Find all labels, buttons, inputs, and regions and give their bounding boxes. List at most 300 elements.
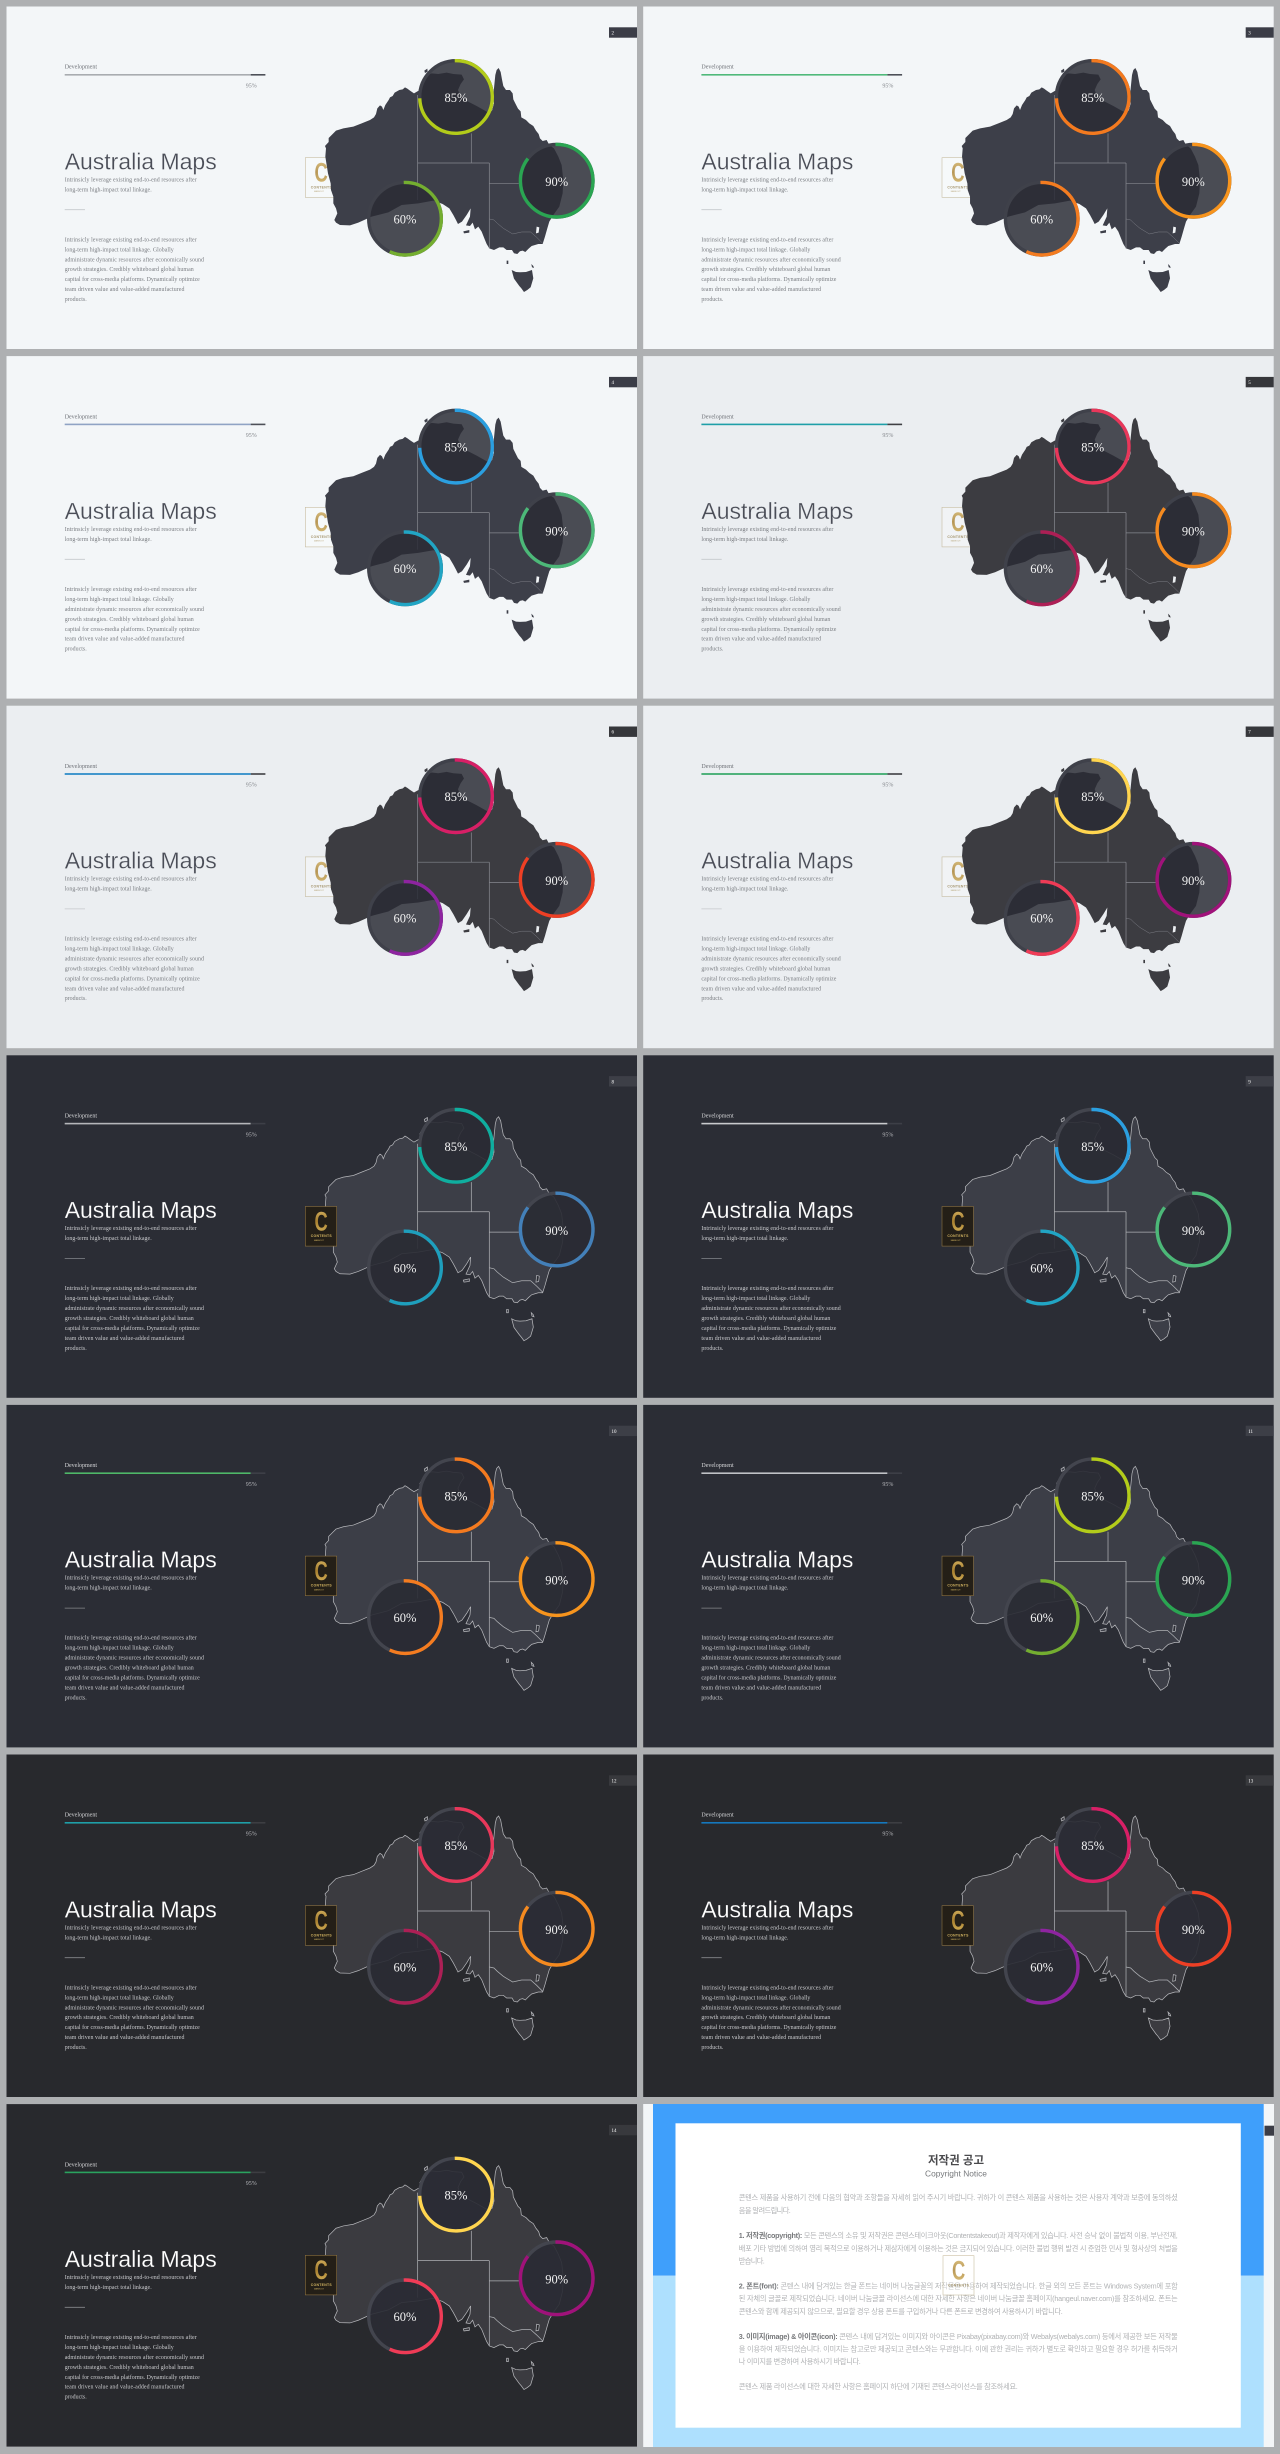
logo: MAKEOUT <box>951 1588 961 1591</box>
heading: development: Development <box>65 2162 97 2168</box>
title: Australia Maps <box>701 1197 853 1223</box>
circle: 90% <box>1156 143 1231 218</box>
map of Australia <box>962 1117 1200 1341</box>
circle: 90%: 90% <box>1182 1923 1205 1937</box>
subtitle: Intrinsicly leverage existing end-to-end resources after <box>701 1924 833 1931</box>
progress value: 95% <box>882 1832 893 1838</box>
body paragraph: team driven value and value-added manufactured <box>701 1335 821 1342</box>
panel: copyright notice <box>643 2104 1274 2447</box>
circle: 85% <box>1055 1458 1130 1533</box>
circle: 60%: 60% <box>394 562 416 576</box>
body paragraph: Intrinsicly leverage existing end-to-end resources after <box>701 236 833 243</box>
progress value: 95% <box>882 1482 893 1488</box>
circle: 85% <box>1055 409 1130 484</box>
logo: C <box>314 856 328 887</box>
progress value: 95% <box>246 2181 257 2187</box>
section: image and icon <box>739 2332 1178 2366</box>
heading: development: Development <box>65 65 97 71</box>
logo: C <box>951 507 965 537</box>
body paragraph: growth strategies. Credibly whiteboard global human <box>65 267 194 273</box>
circle: 85%: 85% <box>445 2189 467 2203</box>
page number tab: 10 <box>612 1430 617 1435</box>
page number tab <box>609 377 637 387</box>
body paragraph: growth strategies. Credibly whiteboard global human <box>701 1666 830 1672</box>
circle: 85% <box>418 1108 494 1183</box>
circle: 85% <box>1055 759 1130 834</box>
circle: 85% <box>418 59 494 135</box>
circle: 90%: 90% <box>545 1224 568 1238</box>
heading: development: Development <box>701 1114 734 1120</box>
circle: 90%: 90% <box>1182 1573 1205 1587</box>
heading: development: Development <box>701 65 734 71</box>
circle: 85%: 85% <box>1081 1140 1104 1154</box>
circle: 60%: 60% <box>394 1960 416 1974</box>
logo: CONTENTS <box>311 1584 332 1588</box>
page number tab <box>609 1426 637 1436</box>
logo: C <box>951 1555 965 1586</box>
body paragraph: growth strategies. Credibly whiteboard global human <box>65 617 194 623</box>
circle: 60% <box>367 1580 443 1655</box>
section: copyright: 1. 저작권(copyright): 모든 콘텐스의 소유 및 저작권은 콘텐스테이크아웃(Contentstakeout)과 제작자에게 있습니다. 사전 승낙 없이 불법적 이용, 부난전재, <box>739 2231 1178 2240</box>
circle: 85%: 85% <box>1081 1489 1104 1503</box>
circle: 85% <box>418 409 494 484</box>
logo: CONTENTS <box>947 1933 969 1937</box>
section: copyright: 받습니다. <box>739 2256 765 2266</box>
body paragraph: team driven value and value-added manufactured <box>701 985 821 992</box>
logo: C <box>951 856 965 887</box>
body paragraph: team driven value and value-added manufactured <box>65 1685 184 1692</box>
title: Australia Maps <box>65 1547 217 1573</box>
body paragraph: long-term high-impact total linkage. Globally <box>701 1995 810 2001</box>
body paragraph: products. <box>701 1346 724 1352</box>
circle: 90% <box>519 1891 594 1966</box>
circle: 90%: 90% <box>545 525 568 539</box>
page number tab <box>1246 1426 1274 1436</box>
logo: MAKEOUT <box>314 1239 325 1242</box>
body paragraph: growth strategies. Credibly whiteboard global human <box>65 1316 194 1322</box>
section: font: 2. 폰트(font): 콘텐스 내에 담겨있는 한글 폰트는 네이버 나눔글꼴의 저작물을 이용하여 제작되었습니다. 한글 외의 모든 폰트는 Windows System에 포함 <box>739 2282 1178 2290</box>
subtitle: Intrinsicly leverage existing end-to-end resources after <box>65 176 197 183</box>
body paragraph: growth strategies. Credibly whiteboard global human <box>701 617 830 623</box>
subtitle: long-term high-impact total linkage. <box>701 187 789 193</box>
body paragraph: long-term high-impact total linkage. Globally <box>65 947 174 953</box>
body paragraph: growth strategies. Credibly whiteboard global human <box>65 1666 194 1672</box>
circle: 85% <box>418 759 494 834</box>
body paragraph: products. <box>65 996 87 1002</box>
body paragraph: team driven value and value-added manufactured <box>65 985 184 992</box>
logo: MAKEOUT <box>314 889 325 892</box>
progress bar <box>65 1123 265 1124</box>
subtitle <box>701 1225 833 1242</box>
circle: 85% <box>418 2157 494 2232</box>
intro text <box>739 2193 1178 2215</box>
subtitle: long-term high-impact total linkage. <box>701 537 789 543</box>
body paragraph: team driven value and value-added manufactured <box>65 286 184 293</box>
page number tab <box>609 2125 637 2135</box>
body paragraph <box>701 236 841 303</box>
subtitle: long-term high-impact total linkage. <box>65 1586 152 1592</box>
page number tab: 5 <box>1248 381 1251 386</box>
circle: 85%: 85% <box>445 1489 467 1503</box>
subtitle: long-term high-impact total linkage. <box>65 537 152 543</box>
circle: 60% <box>367 1230 443 1305</box>
body paragraph: Intrinsicly leverage existing end-to-end resources after <box>65 586 197 593</box>
subtitle: long-term high-impact total linkage. <box>65 1935 152 1941</box>
logo: CONTENTS <box>311 1933 332 1937</box>
body paragraph: Intrinsicly leverage existing end-to-end resources after <box>65 936 197 943</box>
circle: 60%: 60% <box>1030 212 1053 226</box>
body paragraph: capital for cross-media platforms. Dynamically optimize <box>701 1675 837 1682</box>
title: Australia Maps <box>65 1197 217 1223</box>
intro text: 콘텐스 제품을 사용하기 전에 다음의 협약과 조항들을 자세히 읽어 주시기 바랍니다. 귀하가 이 콘텐스 제품을 사용하는 것은 사용자 계약과 보증에 동의하셨 <box>739 2193 1178 2202</box>
body paragraph: products. <box>701 996 724 1002</box>
body paragraph: growth strategies. Credibly whiteboard global human <box>701 267 830 273</box>
subtitle: Intrinsicly leverage existing end-to-end resources after <box>701 176 833 183</box>
circle: 90%: 90% <box>545 874 568 888</box>
title: Australia Maps <box>65 2246 217 2272</box>
progress bar <box>701 1472 902 1474</box>
subtitle <box>701 526 833 543</box>
body paragraph <box>65 586 204 653</box>
logo: CONTENTS <box>948 2284 970 2288</box>
panel: slide 11 <box>643 1405 1274 1747</box>
body paragraph <box>65 936 204 1002</box>
circle: 90%: 90% <box>1182 1224 1205 1238</box>
body paragraph: administrate dynamic resources after economically sound <box>701 1305 841 1312</box>
heading: development: Development <box>701 414 734 420</box>
panel: slide 4 <box>6 356 637 699</box>
circle: 60% <box>367 2279 443 2354</box>
body paragraph: products. <box>701 1695 724 1701</box>
subtitle: long-term high-impact total linkage. <box>701 1935 789 1941</box>
logo: MAKEOUT <box>314 2288 325 2291</box>
page number tab <box>1246 377 1274 387</box>
body paragraph: capital for cross-media platforms. Dynamically optimize <box>65 2024 200 2031</box>
logo <box>942 856 973 896</box>
body paragraph: Intrinsicly leverage existing end-to-end resources after <box>701 1635 833 1642</box>
body paragraph <box>701 1984 841 2051</box>
circle: 90% <box>519 493 594 568</box>
progress bar <box>701 424 902 425</box>
logo: C <box>314 507 328 537</box>
body paragraph <box>701 586 841 653</box>
progress bar <box>701 74 902 76</box>
page number tab <box>609 27 637 38</box>
body paragraph: Intrinsicly leverage existing end-to-end resources after <box>701 586 833 593</box>
logo: C <box>314 1905 328 1935</box>
progress value: 95% <box>246 433 257 439</box>
body paragraph: growth strategies. Credibly whiteboard global human <box>65 966 194 972</box>
logo: MAKEOUT <box>951 889 961 892</box>
page number tab: 2 <box>612 32 614 36</box>
heading: development: Development <box>701 1813 734 1819</box>
circle: 85%: 85% <box>445 790 467 804</box>
logo: MAKEOUT <box>951 1938 961 1941</box>
subtitle <box>701 1575 833 1592</box>
logo: MAKEOUT <box>951 540 961 543</box>
body paragraph: long-term high-impact total linkage. Globally <box>701 1296 810 1302</box>
subtitle <box>65 876 197 892</box>
body paragraph: capital for cross-media platforms. Dynamically optimize <box>65 626 200 633</box>
body paragraph: capital for cross-media platforms. Dynamically optimize <box>65 1675 200 1682</box>
body paragraph: capital for cross-media platforms. Dynamically optimize <box>65 2374 200 2381</box>
heading: development: Development <box>65 1114 97 1120</box>
circle: 60%: 60% <box>394 2310 416 2324</box>
body paragraph: team driven value and value-added manufactured <box>65 1335 184 1342</box>
body paragraph: administrate dynamic resources after economically sound <box>65 956 204 962</box>
panel: slide 5 <box>643 356 1274 699</box>
body paragraph: products. <box>65 297 87 303</box>
map of Australia <box>325 68 563 292</box>
body paragraph: growth strategies. Credibly whiteboard global human <box>701 2015 830 2021</box>
subtitle <box>701 1924 833 1941</box>
panel: slide 6 <box>6 706 637 1048</box>
heading: development: Development <box>65 764 97 770</box>
section: image and icon: 3. 이미지(image) & 아이콘(icon): 콘텐스 내에 담겨있는 이미지와 아이콘은 Pixabay(pixabay.com)와 Webalys(webalys.com) 등에서 제공한 보든 저작물 <box>739 2332 1178 2341</box>
title: Australia Maps <box>701 848 853 874</box>
progress bar <box>65 424 265 425</box>
subtitle: Intrinsicly leverage existing end-to-end resources after <box>65 876 197 883</box>
logo <box>305 1555 337 1596</box>
subtitle: long-term high-impact total linkage. <box>65 2285 152 2291</box>
body paragraph: team driven value and value-added manufactured <box>701 286 821 293</box>
circle: 85% <box>1055 1807 1130 1883</box>
panel: slide 10 <box>6 1405 637 1747</box>
subtitle: Intrinsicly leverage existing end-to-end resources after <box>701 876 833 883</box>
page number tab <box>1246 27 1274 38</box>
body paragraph: products. <box>65 2395 87 2401</box>
map of Australia <box>962 767 1200 991</box>
logo: CONTENTS <box>311 885 332 889</box>
circle: 90% <box>1156 1192 1231 1267</box>
circle: 60%: 60% <box>394 912 416 926</box>
circle: 60%: 60% <box>394 1261 416 1275</box>
body paragraph: long-term high-impact total linkage. Globally <box>701 247 810 253</box>
body paragraph: Intrinsicly leverage existing end-to-end resources after <box>65 2334 197 2341</box>
panel: slide 3 <box>643 6 1274 349</box>
body paragraph: products. <box>701 297 724 303</box>
map of Australia <box>962 1466 1200 1690</box>
circle: 85%: 85% <box>1081 790 1104 804</box>
subtitle: long-term high-impact total linkage. <box>701 1236 789 1242</box>
circle: 60% <box>1004 1929 1079 2004</box>
progress value: 95% <box>246 1482 257 1488</box>
progress bar <box>701 773 902 775</box>
subtitle <box>65 2274 197 2291</box>
section: font: 콘텐스와 함께 제공되지 않으므로, 필요할 경우 상용 폰트를 구입하거나 다른 폰트로 변경하여 사용하시기 바랍니다. <box>739 2307 1063 2316</box>
circle: 85%: 85% <box>445 1140 467 1154</box>
page number tab: 11 <box>1248 1430 1254 1435</box>
title: Australia Maps <box>701 498 853 524</box>
body paragraph: team driven value and value-added manufactured <box>701 2034 821 2041</box>
panel: slide 2 <box>6 6 637 349</box>
circle: 60%: 60% <box>394 1611 416 1625</box>
title: Australia Maps <box>701 148 853 174</box>
subtitle: Intrinsicly leverage existing end-to-end resources after <box>65 2274 197 2281</box>
body paragraph: team driven value and value-added manufactured <box>701 1685 821 1692</box>
page number tab: 7 <box>1248 731 1251 736</box>
heading: development: Development <box>701 1463 734 1469</box>
circle: 90% <box>519 842 594 917</box>
body paragraph: long-term high-impact total linkage. Globally <box>65 597 174 603</box>
logo: C <box>951 157 965 187</box>
section: copyright <box>739 2231 1178 2266</box>
body paragraph: Intrinsicly leverage existing end-to-end resources after <box>65 236 197 243</box>
circle: 90%: 90% <box>545 1923 568 1937</box>
logo: C <box>952 2255 966 2285</box>
progress bar <box>65 1472 265 1474</box>
page number tab: 12 <box>612 1780 617 1784</box>
body paragraph: capital for cross-media platforms. Dynamically optimize <box>701 626 837 633</box>
body paragraph: team driven value and value-added manufactured <box>65 636 184 643</box>
body paragraph: administrate dynamic resources after economically sound <box>65 256 204 263</box>
body paragraph: growth strategies. Credibly whiteboard global human <box>701 1316 830 1322</box>
logo <box>305 507 337 547</box>
panel: slide 7 <box>643 706 1274 1048</box>
circle: 90% <box>1156 493 1231 568</box>
body paragraph: long-term high-impact total linkage. Globally <box>65 1646 174 1652</box>
circle: 85% <box>1055 1108 1130 1183</box>
logo <box>942 1555 973 1596</box>
circle: 60% <box>1004 181 1079 256</box>
section: image and icon: 을 이용하여 제작되었습니다. 이미지는 참고로만 제공되고 콘텐스와는 무관합니다. 이에 관한 권리는 귀하가 별도로 확인하고 필요할 경우 허가를 취득하거 <box>739 2344 1178 2354</box>
circle: 60% <box>1004 1580 1079 1655</box>
circle: 60%: 60% <box>1030 1611 1053 1625</box>
logo <box>943 2255 974 2295</box>
subtitle <box>65 176 197 193</box>
body paragraph: long-term high-impact total linkage. Globally <box>701 1646 810 1652</box>
logo: C <box>951 1905 965 1935</box>
subtitle: Intrinsicly leverage existing end-to-end resources after <box>701 1575 833 1582</box>
body paragraph: capital for cross-media platforms. Dynamically optimize <box>65 1325 200 1332</box>
page number tab: 9 <box>1248 1080 1251 1085</box>
circle: 60%: 60% <box>1030 1960 1053 1974</box>
page number tab <box>1246 1775 1274 1786</box>
progress bar <box>65 74 265 76</box>
page number tab <box>609 726 637 737</box>
heading: development: Development <box>65 414 97 420</box>
panel: slide 14 <box>6 2104 637 2447</box>
section: font: 된 자체의 글꼴로 제작되었습니다. 네이버 나눔글꼴 라이선스에 대한 자세한 사항은 네이버 나눔글꼴 홈페이지(hangeul.naver.com)를 참조하세요. 폰트는 <box>739 2294 1178 2303</box>
body paragraph: capital for cross-media platforms. Dynamically optimize <box>701 276 837 283</box>
logo <box>305 856 337 896</box>
page number tab <box>609 1775 637 1786</box>
logo: CONTENTS <box>311 1234 332 1238</box>
subtitle: long-term high-impact total linkage. <box>65 1236 152 1242</box>
circle: 90%: 90% <box>1182 874 1205 888</box>
circle: 60% <box>367 880 443 955</box>
subtitle: Intrinsicly leverage existing end-to-end resources after <box>65 526 197 533</box>
progress bar <box>65 2172 265 2173</box>
circle: 60%: 60% <box>394 212 416 226</box>
body paragraph <box>65 1984 204 2051</box>
circle: 90%: 90% <box>1182 525 1205 539</box>
body paragraph: long-term high-impact total linkage. Globally <box>65 1296 174 1302</box>
map of Australia <box>962 1816 1200 2040</box>
progress value: 95% <box>882 783 893 789</box>
body paragraph: long-term high-impact total linkage. Globally <box>65 247 174 253</box>
body paragraph: Intrinsicly leverage existing end-to-end resources after <box>65 1984 197 1991</box>
map of Australia <box>325 2166 563 2390</box>
map of Australia <box>325 767 563 991</box>
panel: slide 9 <box>643 1055 1274 1398</box>
circle: 85% <box>418 1807 494 1883</box>
title: Australia Maps <box>65 1896 217 1922</box>
body paragraph: products. <box>701 647 724 653</box>
circle: 90%: 90% <box>545 1573 568 1587</box>
closing text: 콘텐스 제품 라이선스에 대한 자세한 사항은 홈페이지 하단에 기재된 콘텐스라이선스를 참조하세요. <box>739 2382 1018 2391</box>
logo <box>305 1905 337 1945</box>
logo: CONTENTS <box>311 2283 332 2287</box>
body paragraph <box>65 236 204 303</box>
logo: C <box>314 1206 328 1236</box>
body paragraph <box>65 1635 204 1701</box>
circle: 60% <box>1004 1230 1079 1305</box>
body paragraph <box>701 1635 841 1701</box>
section: copyright: 배포 기타 방법에 의하여 영리 목적으로 이용하거나 제삼자에게 이용하는 것은 금지되어 있습니다. 이러한 불법 행위 발견 시 준엄한 민사 및 형사상의 처벌을 <box>739 2244 1178 2253</box>
subtitle: long-term high-impact total linkage. <box>701 1586 789 1592</box>
progress value: 95% <box>246 84 257 90</box>
body paragraph: growth strategies. Credibly whiteboard global human <box>65 2015 194 2021</box>
circle: 85%: 85% <box>445 441 467 455</box>
copyright subtitle: Copyright Notice <box>925 2169 987 2179</box>
circle: 85%: 85% <box>445 1839 467 1853</box>
page number tab: 6 <box>612 731 614 736</box>
logo: C <box>314 157 328 187</box>
body paragraph: Intrinsicly leverage existing end-to-end resources after <box>65 1635 197 1642</box>
logo: CONTENTS <box>947 885 969 889</box>
logo: C <box>951 1206 965 1236</box>
subtitle: Intrinsicly leverage existing end-to-end resources after <box>65 1575 197 1582</box>
body paragraph: long-term high-impact total linkage. Globally <box>65 2345 174 2351</box>
circle: 60%: 60% <box>1030 912 1053 926</box>
logo: MAKEOUT <box>314 190 325 193</box>
circle: 90%: 90% <box>545 175 568 189</box>
body paragraph: administrate dynamic resources after economically sound <box>65 1655 204 1662</box>
body paragraph: administrate dynamic resources after economically sound <box>701 256 841 263</box>
circle: 60% <box>367 1929 443 2004</box>
heading: development: Development <box>701 764 734 770</box>
subtitle <box>701 176 833 193</box>
logo: C <box>314 1555 328 1586</box>
body paragraph: administrate dynamic resources after economically sound <box>701 2004 841 2011</box>
title: Australia Maps <box>65 498 217 524</box>
circle: 60% <box>367 181 443 256</box>
circle: 85% <box>418 1458 494 1533</box>
logo: MAKEOUT <box>314 540 325 543</box>
progress value: 95% <box>882 84 893 90</box>
page number tab: 3 <box>1248 32 1251 36</box>
body paragraph: long-term high-impact total linkage. Globally <box>701 597 810 603</box>
body paragraph: products. <box>701 2045 724 2051</box>
subtitle: Intrinsicly leverage existing end-to-end resources after <box>701 526 833 533</box>
circle: 90% <box>519 1542 594 1617</box>
subtitle: Intrinsicly leverage existing end-to-end resources after <box>65 1225 197 1232</box>
title: Australia Maps <box>65 148 217 174</box>
logo <box>942 157 973 197</box>
body paragraph: products. <box>65 1346 87 1352</box>
logo: MAKEOUT <box>314 1938 325 1941</box>
page number tab: 4 <box>612 381 614 386</box>
logo: CONTENTS <box>947 1234 969 1238</box>
body paragraph: administrate dynamic resources after economically sound <box>701 1655 841 1662</box>
subtitle <box>65 1924 197 1941</box>
logo <box>305 1206 337 1246</box>
circle: 90% <box>1156 842 1231 917</box>
progress value: 95% <box>882 1132 893 1138</box>
subtitle: Intrinsicly leverage existing end-to-end resources after <box>701 1225 833 1232</box>
body paragraph <box>65 1285 204 1352</box>
